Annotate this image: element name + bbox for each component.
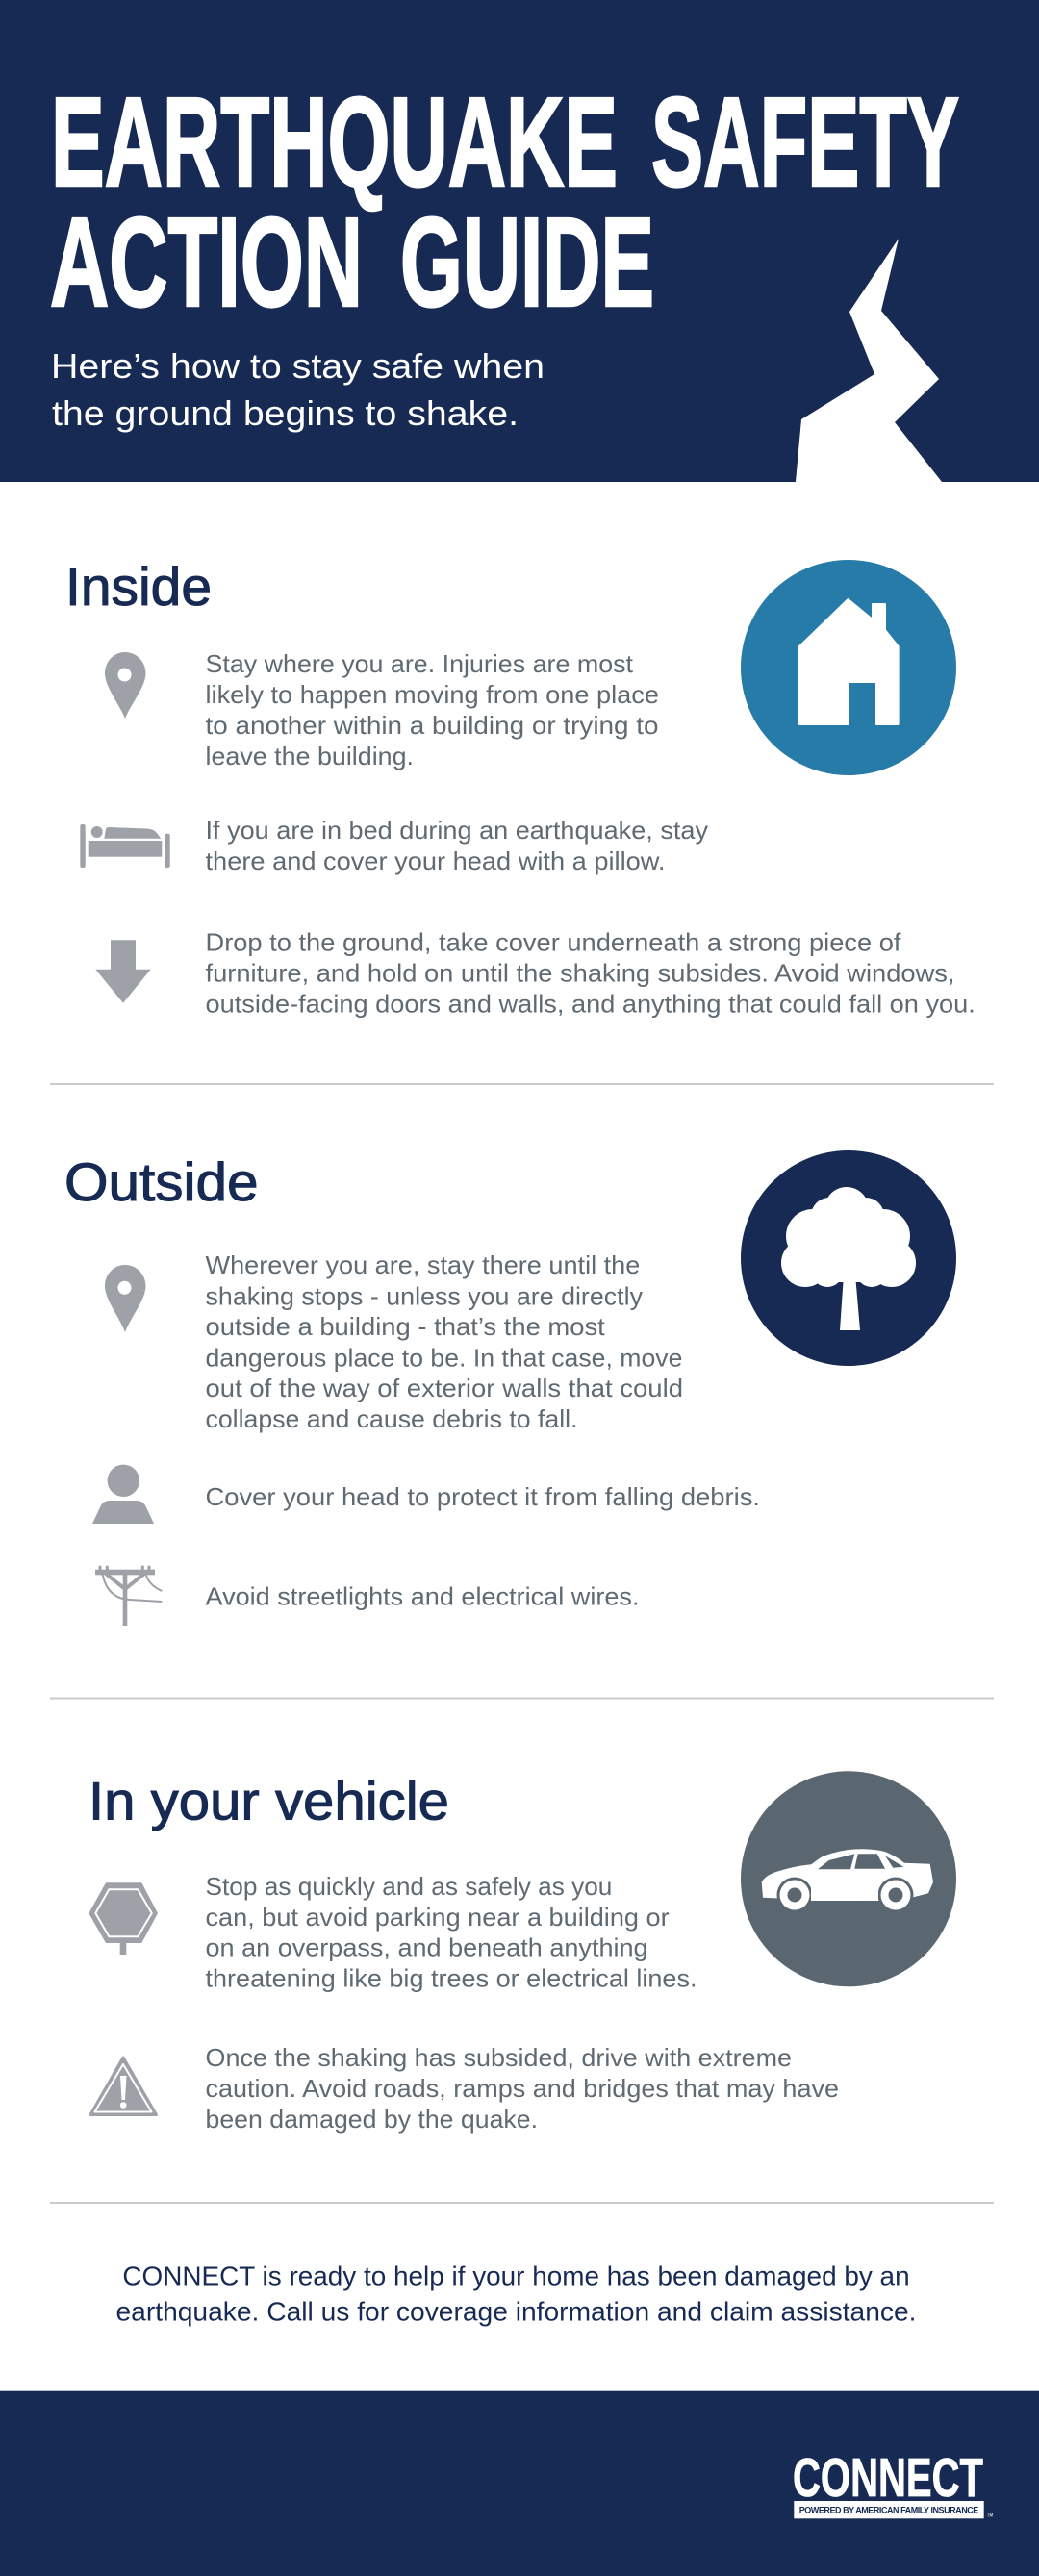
callout: connect message: [115, 2261, 916, 2327]
text: once the shaking: caution. Avoid roads, ramps and bridges that may have: [206, 2074, 839, 2103]
panel: outside: [64, 1150, 956, 1626]
icon: location pin: [105, 1265, 146, 1332]
icon: ground crack: [796, 239, 942, 482]
subtitle: [51, 346, 545, 433]
heading: outside: Outside: [64, 1151, 259, 1212]
text: stay where you are: [206, 649, 659, 770]
icon: car in grey circle: [741, 1771, 956, 1986]
icon: utility pole: [95, 1566, 162, 1626]
text: avoid streetlights: Avoid streetlights and electrical wires.: [206, 1581, 639, 1610]
text: wherever you are: outside a building - that’s the most: [206, 1312, 606, 1341]
text: stay where you are: leave the building.: [206, 742, 414, 770]
text: stay where you are: Stay where you are. Injuries are most: [206, 649, 634, 678]
text: cover your head: Cover your head to protect it from falling debris.: [206, 1482, 760, 1511]
text: wherever you are: dangerous place to be. In that case, move: [206, 1343, 682, 1372]
title: [50, 71, 959, 333]
text: if you are in bed: [206, 816, 708, 875]
text: stop as quickly: can, but avoid parking near a building or: [206, 1903, 670, 1932]
panel: inside: [65, 556, 976, 1018]
icon: down arrow: [95, 940, 151, 1003]
callout: connect message: CONNECT is ready to help if your home has been damaged by an: [122, 2261, 910, 2291]
text: wherever you are: shaking stops - unless you are directly: [206, 1281, 643, 1310]
icon: stop sign: [89, 1882, 158, 1955]
text: wherever you are: collapse and cause debris to fall.: [206, 1404, 577, 1433]
icon: location pin: [105, 652, 146, 719]
title: ACTION: [50, 191, 363, 333]
text: once the shaking: Once the shaking has subsided, drive with extreme: [206, 2043, 792, 2072]
text: stop as quickly: [206, 1872, 697, 1993]
text: once the shaking: [206, 2043, 839, 2134]
text: if you are in bed: If you are in bed during an earthquake, stay: [206, 816, 708, 845]
subtitle: the ground begins to shake.: [52, 393, 519, 433]
title: EARTHQUAKE: [51, 71, 618, 213]
subtitle: Here’s how to stay safe when: [51, 346, 545, 386]
icon: person: [92, 1465, 154, 1524]
heading: in your vehicle: In your vehicle: [89, 1771, 449, 1831]
heading: inside: Inside: [65, 556, 212, 617]
icon: bed: [80, 824, 170, 868]
text: stay where you are: to another within a building or trying to: [206, 711, 658, 740]
panel: footer: [0, 2391, 1039, 2576]
text: drop to the ground: Drop to the ground, take cover underneath a strong piece of: [206, 927, 901, 956]
logo: connect: POWERED BY AMERICAN FAMILY INSURANCE: [799, 2506, 978, 2515]
text: stay where you are: likely to happen moving from one place: [206, 680, 659, 709]
text: drop to the ground: outside-facing doors and walls, and anything that could fall on you.: [206, 989, 976, 1018]
text: once the shaking: been damaged by the quake.: [206, 2105, 538, 2134]
text: if you are in bed: there and cover your head with a pillow.: [206, 846, 666, 875]
icon: warning triangle: [90, 2058, 156, 2114]
text: drop to the ground: [206, 927, 976, 1018]
callout: connect message: earthquake. Call us for coverage information and claim assistance.: [115, 2297, 916, 2327]
text: wherever you are: out of the way of exterior walls that could: [206, 1374, 683, 1402]
title: GUIDE: [400, 191, 654, 333]
panel: in your vehicle: [89, 1771, 956, 2134]
text: wherever you are: [206, 1250, 683, 1433]
logo: connect: TM: [987, 2513, 993, 2519]
icon: house in blue circle: [741, 560, 956, 775]
icon: tree in navy circle: [741, 1150, 956, 1366]
text: stop as quickly: threatening like big trees or electrical lines.: [206, 1964, 697, 1993]
text: wherever you are: Wherever you are, stay there until the: [206, 1250, 640, 1279]
text: drop to the ground: furniture, and hold on until the shaking subsides. Avoid windows,: [206, 959, 954, 988]
text: stop as quickly: on an overpass, and beneath anything: [206, 1933, 648, 1962]
text: stop as quickly: Stop as quickly and as safely as you: [206, 1872, 612, 1901]
panel: header banner: [0, 0, 1039, 482]
